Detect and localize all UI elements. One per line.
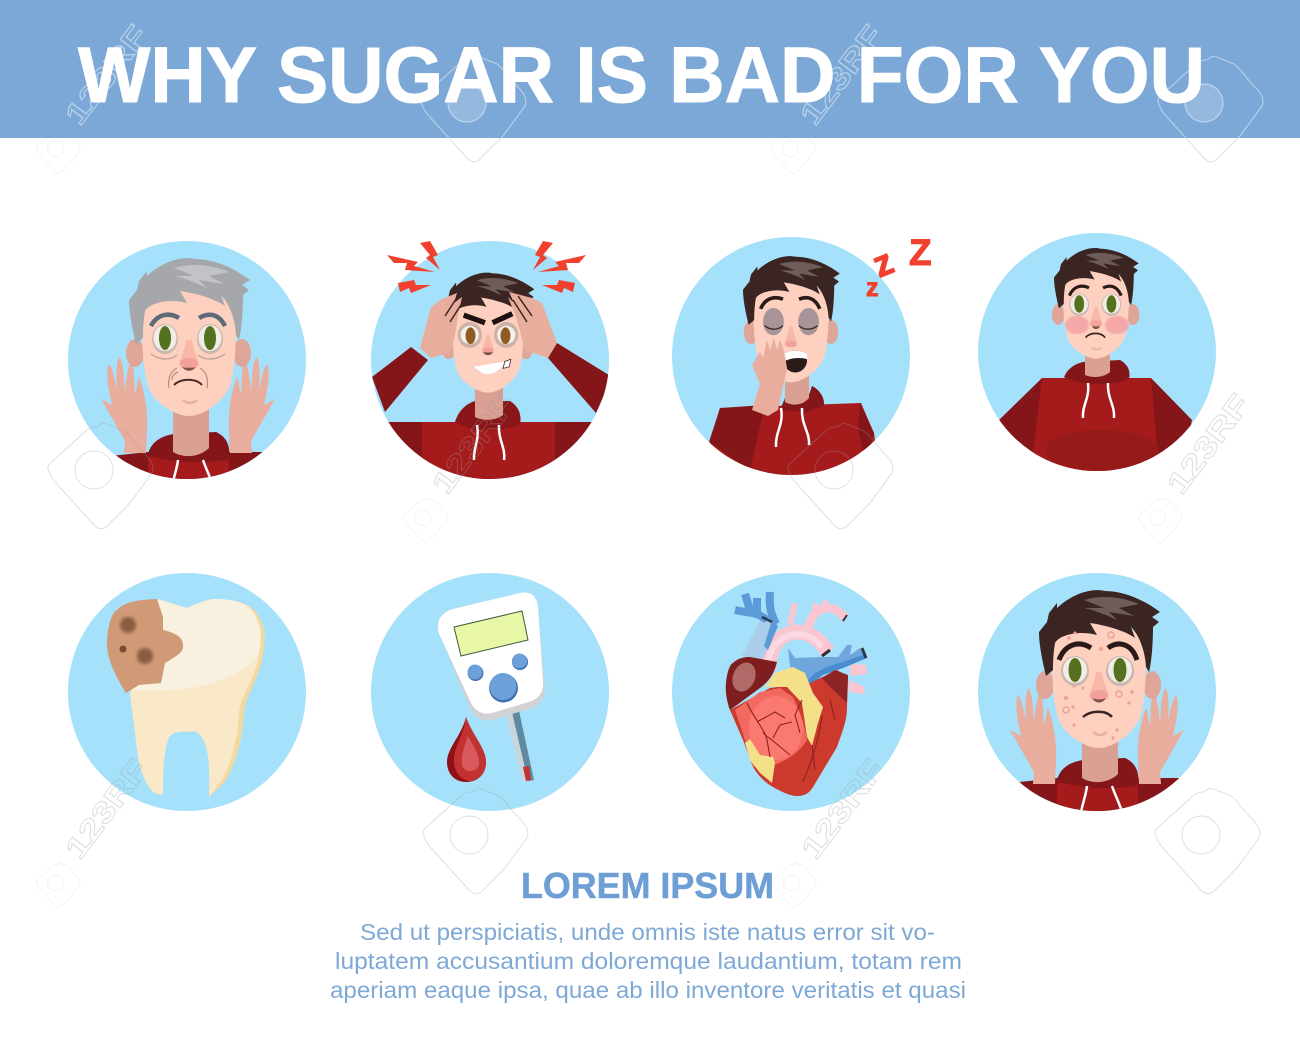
pink aorta (769, 600, 867, 694)
hoodie (116, 409, 262, 479)
body paragraph (330, 919, 966, 1003)
watermarks on page: 123RF (59, 754, 155, 865)
heading: lorem ipsum: LOREM IPSUM (521, 865, 774, 906)
circle: heart (672, 573, 910, 811)
hoodie (1019, 778, 1180, 811)
acne face (1036, 590, 1161, 748)
meter buttons (468, 654, 528, 702)
header banner (0, 0, 1300, 138)
title: WHY SUGAR IS BAD FOR YOU (78, 30, 1205, 119)
right hand (1138, 688, 1184, 784)
zzz (866, 232, 932, 302)
test strip (505, 711, 534, 782)
watermarks on page: 123RF (1161, 389, 1257, 500)
body paragraph: aperiam eaque ipsa, quae ab illo inventore veritatis et quasi (330, 977, 966, 1003)
zzz: Z (909, 232, 932, 273)
lightning bolts right (533, 241, 586, 293)
circle: glucose meter (371, 573, 609, 811)
sleepy face (743, 256, 840, 382)
right hand (229, 357, 275, 453)
zzz: z (866, 274, 878, 302)
meter body (438, 593, 545, 721)
body paragraph: luptatem accusantium doloremque laudantium, totam rem (335, 948, 962, 974)
watermarks on banner (67, 23, 1264, 138)
watermarks on page (36, 56, 1263, 908)
circle: flushed cheeks (978, 233, 1216, 480)
blood drop (447, 717, 486, 782)
hands on head (420, 292, 557, 358)
circle: fatigue (672, 232, 932, 480)
watermarks on banner: 123RF (59, 20, 155, 131)
hoodie (710, 403, 875, 475)
watermarks on banner: 123RF (794, 20, 890, 131)
heart muscle (726, 657, 848, 796)
coronary veins (747, 700, 835, 782)
tooth (130, 599, 265, 797)
circle: aged skin (68, 241, 306, 504)
pimples (1064, 632, 1134, 740)
meter screen (454, 611, 528, 656)
left hand (1010, 688, 1056, 784)
circle: tooth decay (68, 573, 306, 811)
watermarks on page: 123RF (426, 389, 522, 500)
aged face (126, 258, 251, 416)
watermarks on page: 123RF (795, 754, 891, 865)
hand over mouth (752, 338, 787, 416)
fat deposits (745, 667, 823, 783)
body paragraph: Sed ut perspiciatis, unde omnis iste natus error sit vo- (360, 919, 935, 945)
left hand (101, 357, 147, 453)
worried face (1052, 248, 1139, 359)
angry face (442, 273, 534, 393)
zzz: z (867, 240, 899, 285)
circle: acne (978, 573, 1216, 830)
hoodie (380, 422, 600, 480)
cavity (107, 599, 183, 693)
hoodie (999, 378, 1192, 480)
lightning bolts left (387, 241, 440, 293)
circle: headache (371, 241, 612, 480)
blue vessels (735, 592, 867, 687)
